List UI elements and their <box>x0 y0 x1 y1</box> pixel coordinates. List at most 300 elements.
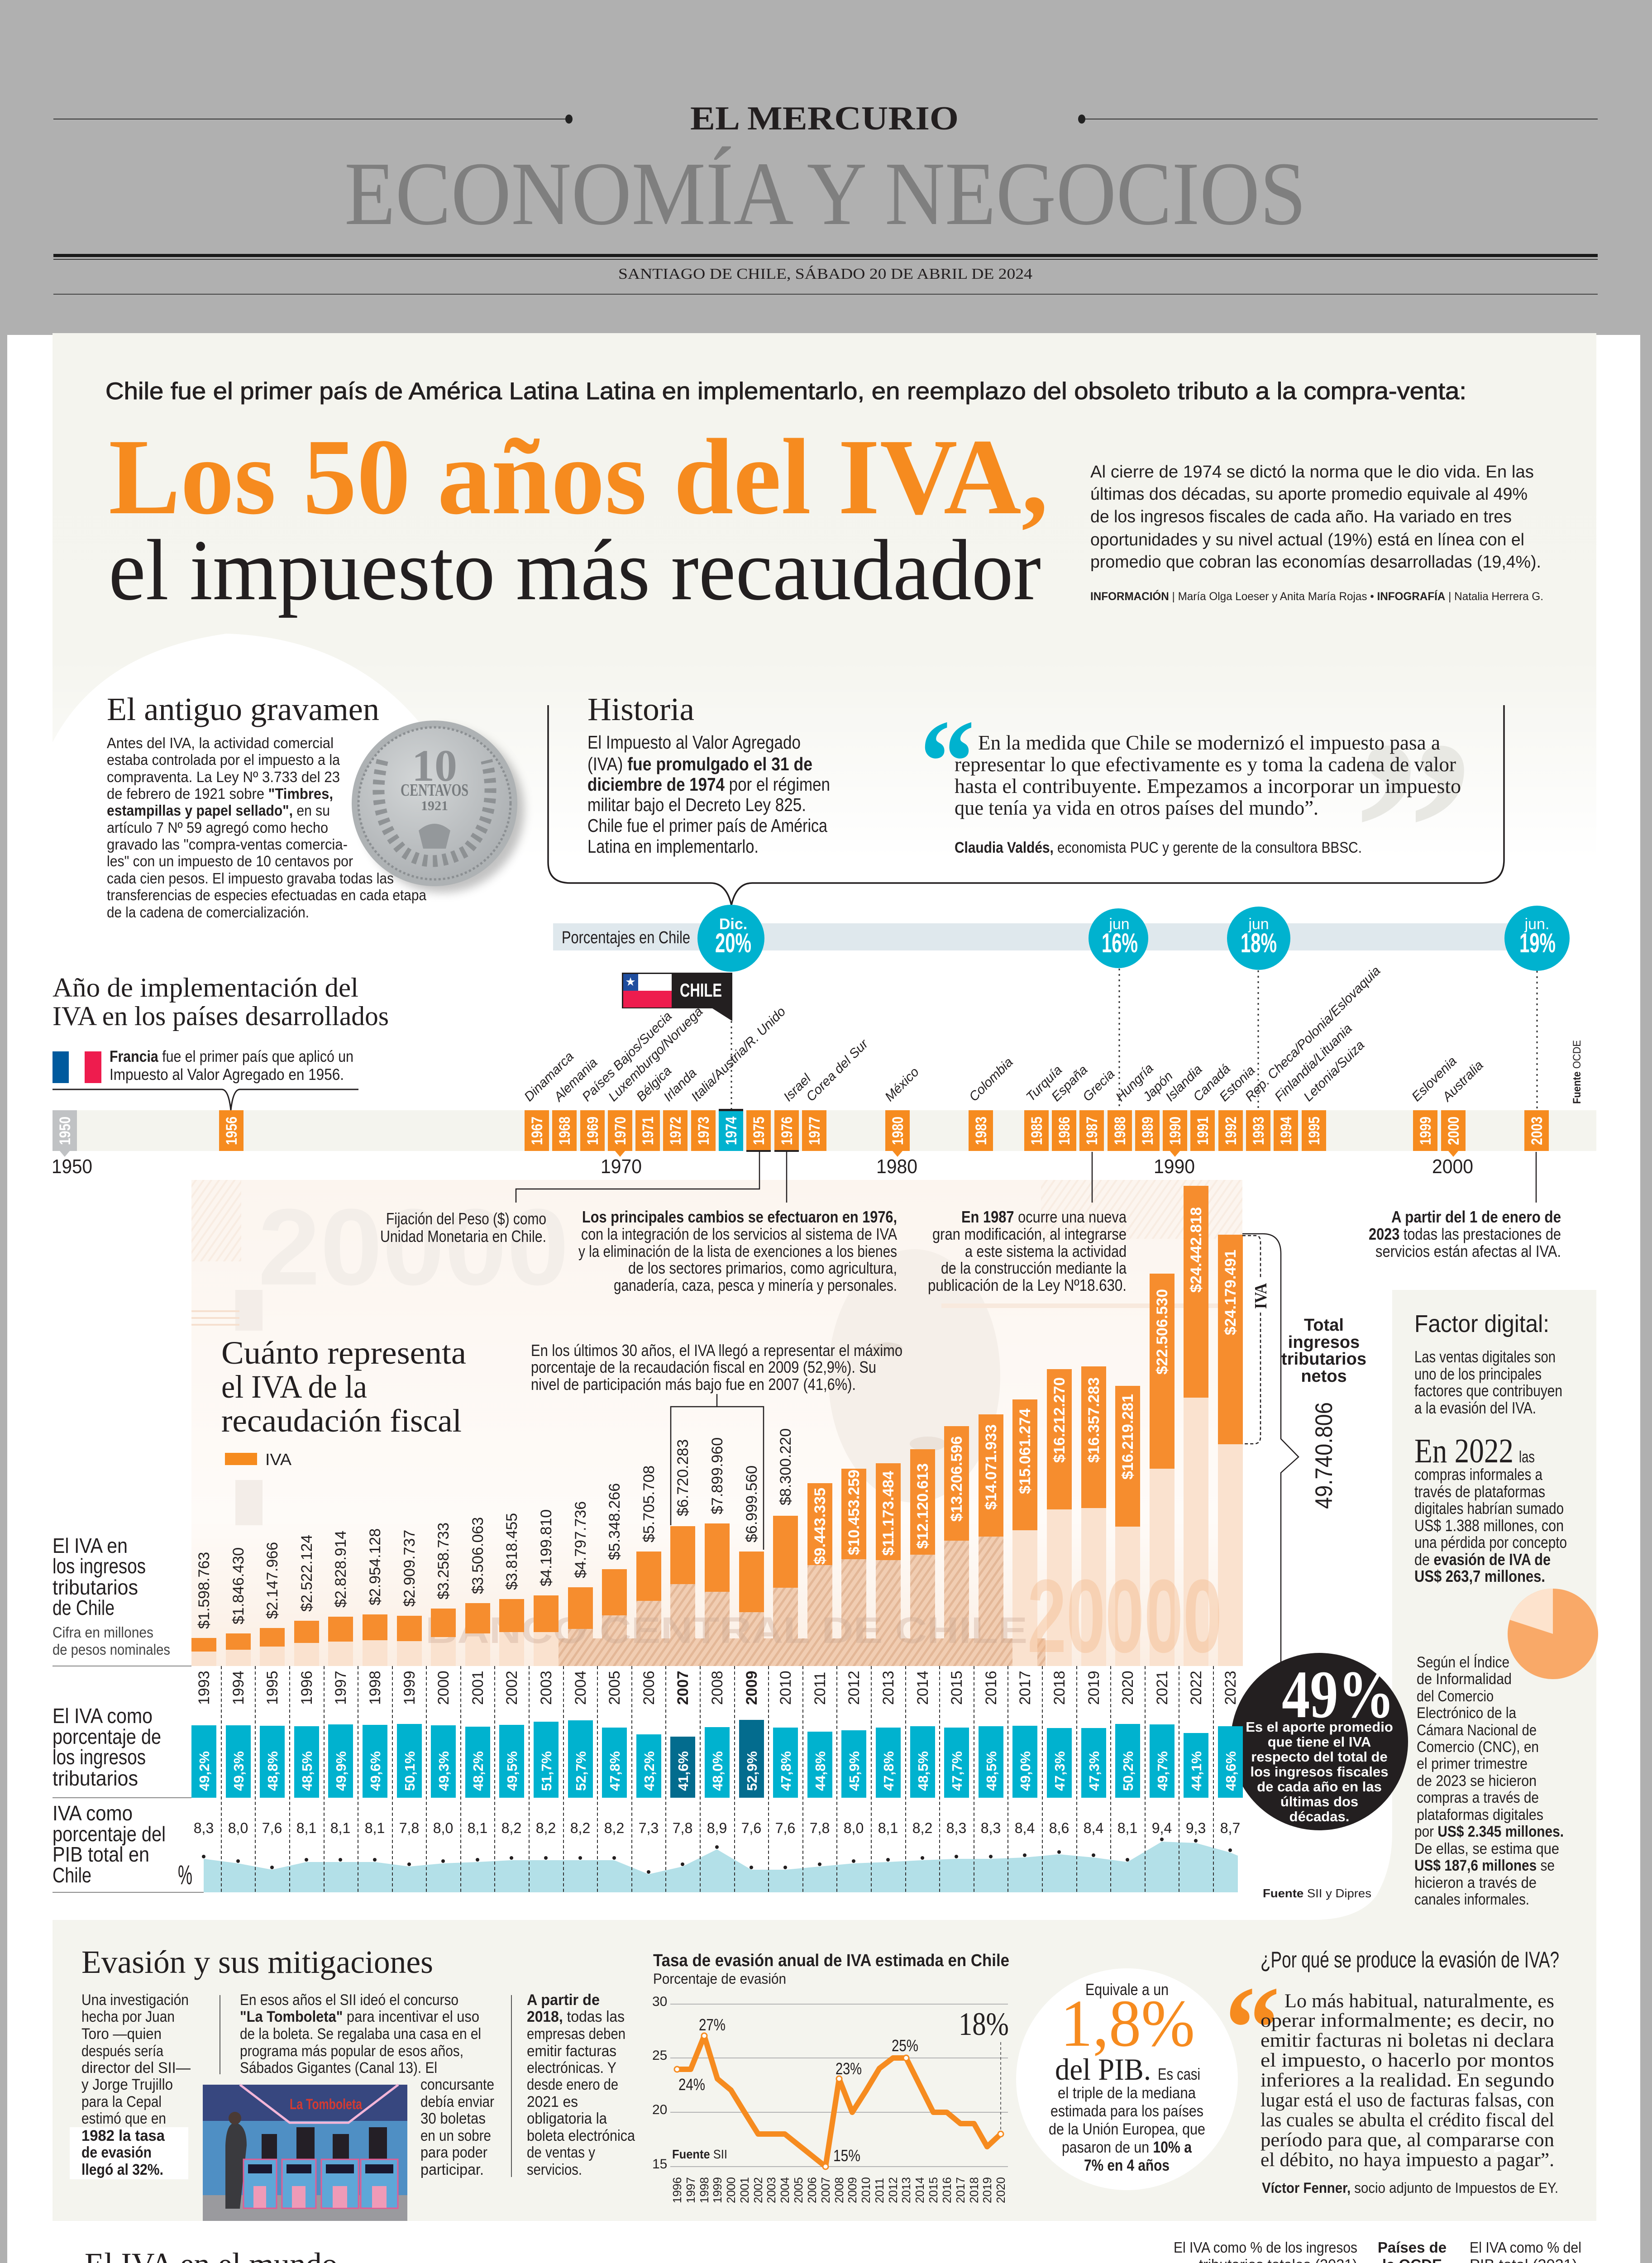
total net tax revenue: netos <box>1301 1367 1347 1386</box>
pie chart: evasion share <box>1508 1589 1598 1679</box>
panel: Factor digital: de evasión de IVA de <box>1414 1550 1551 1569</box>
text column 2: participar. <box>420 2161 484 2178</box>
text column 1: de evasión <box>81 2144 152 2161</box>
callout: 49% <box>1231 1653 1408 1830</box>
area chart: IVA as percentage of GDP: 8,2 <box>912 1820 932 1836</box>
area chart: IVA as percentage of GDP: 7,8 <box>399 1820 419 1836</box>
year labels for the main chart: 1993 <box>196 1671 213 1705</box>
panel: El antiguo gravamen: Antes del IVA, la actividad comercial <box>107 735 334 751</box>
country labels on timeline: Irlanda <box>661 1066 700 1104</box>
country labels on timeline <box>521 964 1486 1105</box>
line chart: evasion rate: 2006 <box>805 2177 819 2203</box>
year box labels: 1992 <box>1222 1117 1240 1145</box>
quote: Víctor Fenner: el débito, no haya impuesto a pagar”. <box>1260 2149 1554 2171</box>
area chart: IVA as percentage of GDP: 8,1 <box>1117 1820 1137 1836</box>
year box labels: 1987 <box>1084 1117 1101 1145</box>
note: 1987: gran modificación, al integrarse <box>932 1225 1127 1243</box>
text: Índice de Informalidad: hicieron a través de <box>1414 1874 1537 1891</box>
bar chart: IVA share of tax revenue: 51,7% <box>539 1751 554 1791</box>
note: Fijación del Peso: Fijación del Peso ($) como <box>386 1209 546 1228</box>
text column 1: para la Cepal <box>81 2093 162 2110</box>
year box labels: 1985 <box>1028 1117 1046 1145</box>
country labels on timeline: Colombia <box>966 1055 1016 1104</box>
year labels for the main chart: 2017 <box>1017 1671 1034 1705</box>
year box labels: 1993 <box>1250 1117 1267 1145</box>
decade labels: 1950 <box>52 1155 92 1178</box>
year labels for the main chart: 2004 <box>572 1671 589 1705</box>
line chart: evasion rate <box>652 1951 1009 2203</box>
row labels for the main chart: Chile <box>53 1863 91 1887</box>
line chart: evasion rate: 2005 <box>792 2177 805 2203</box>
line chart: evasion rate: 30 <box>652 1994 667 2009</box>
country labels on timeline: Finlandia/Lituania <box>1272 1022 1355 1104</box>
row labels for the main chart: IVA como <box>53 1801 133 1825</box>
decade labels: 2000 <box>1432 1155 1473 1178</box>
callout: CHILE flag: CHILE <box>680 979 722 1001</box>
heading: Año de implementación <box>53 973 389 1031</box>
line chart: evasion rate: 2014 <box>913 2177 926 2203</box>
text column 3: de ventas y <box>527 2144 595 2161</box>
area chart: IVA as percentage of GDP: 8,0 <box>844 1820 864 1836</box>
year labels for the main chart: 2002 <box>503 1671 520 1705</box>
year box labels: 1969 <box>584 1117 602 1145</box>
text: Índice de Informalidad: US$ 187,6 millones se <box>1414 1857 1555 1874</box>
timeline: percentages in Chile: jun <box>1108 916 1130 933</box>
text column 1: Toro —quien <box>81 2025 162 2043</box>
bar chart: IVA share of tax revenue: 48,5% <box>984 1751 999 1791</box>
intro text: de los ingresos fiscales de cada año. Ha variado en tres <box>1090 507 1512 526</box>
year box labels: 1971 <box>640 1117 657 1145</box>
year boxes <box>53 1109 1549 1157</box>
panel: El antiguo gravamen: compraventa. La Ley Nº 3.733 del 23 <box>107 769 340 785</box>
text column 2: concursante <box>420 2076 494 2093</box>
panel: Factor digital: a la evasión del IVA. <box>1414 1399 1536 1417</box>
text: Índice de Informalidad: Electrónico de la <box>1417 1704 1516 1722</box>
area chart: IVA as percentage of GDP: 8,2 <box>604 1820 624 1836</box>
timeline: percentages in Chile: jun. <box>1524 916 1549 933</box>
panel: El antiguo gravamen: transferencias de especies efectuadas en cada etapa <box>107 887 427 903</box>
note: 1987: En 1987 ocurre una nueva <box>961 1208 1127 1226</box>
year box labels: 2000 <box>1445 1117 1462 1145</box>
bar chart: IVA share of tax revenue: 48,5% <box>915 1751 931 1791</box>
country labels on timeline: Hungría <box>1113 1061 1156 1104</box>
bar chart: IVA share of tax revenue: 49,6% <box>368 1751 383 1791</box>
decade labels: 1990 <box>1154 1155 1195 1178</box>
stacked bar chart: IVA in tax revenue: $22.506.530 <box>1154 1289 1171 1375</box>
panel: El antiguo gravamen: El antiguo gravamen <box>107 691 379 727</box>
panel: Factor digital: Las ventas digitales son <box>1414 1347 1556 1366</box>
quote: Víctor Fenner: Víctor Fenner, socio adjunto de Impuestos de EY. <box>1262 2180 1558 2196</box>
area chart: IVA as percentage of GDP: 8,2 <box>501 1820 521 1836</box>
year labels for the main chart: 2021 <box>1154 1671 1171 1705</box>
year labels for the main chart: 2005 <box>606 1671 623 1705</box>
line chart: evasion rate: 25% <box>892 2036 918 2055</box>
text: Índice de Informalidad: Cámara Nacional de <box>1417 1722 1537 1739</box>
year labels for the main chart: 1997 <box>332 1671 349 1705</box>
line chart: evasion rate: 1996 <box>670 2177 684 2203</box>
stacked bar chart: IVA in tax revenue: $4.797.736 <box>572 1501 589 1578</box>
note: 1987 <box>928 1208 1127 1294</box>
area chart: IVA as percentage of GDP: 8,1 <box>468 1820 487 1836</box>
bar chart: IVA share of tax revenue: 50,2% <box>1120 1751 1136 1791</box>
text column 3: empresas deben <box>527 2025 625 2043</box>
text column 1: después sería <box>81 2043 163 2060</box>
row labels for the main chart: Cifra en millones <box>53 1624 153 1641</box>
country labels on timeline: Islandia <box>1163 1062 1205 1104</box>
panel: Factor digital background <box>1313 1290 1596 1920</box>
text column 1: hecha por Juan <box>81 2008 175 2025</box>
stacked bar chart: IVA in tax revenue: BANCO CENTRAL DE CHILE <box>425 1610 1027 1651</box>
text column 2: debía enviar <box>420 2093 494 2110</box>
area chart: IVA as percentage of GDP: 8,1 <box>330 1820 350 1836</box>
area chart: IVA as percentage of GDP: 8,3 <box>981 1820 1001 1836</box>
text column 3: boleta electrónica <box>527 2127 635 2144</box>
area chart: IVA as percentage of GDP: 8,1 <box>365 1820 385 1836</box>
text column 3: obligatoria la <box>527 2110 607 2127</box>
callout: 49%: los ingresos fiscales <box>1251 1764 1388 1780</box>
title block: Los 50 años del IVA, <box>109 416 1048 537</box>
panel: Historia: Latina en implementarlo. <box>587 836 759 857</box>
heading: Cuánto representa: recaudación fiscal <box>221 1403 462 1439</box>
beige header panel <box>53 333 1596 860</box>
stacked bar chart: IVA in tax revenue: $4.199.810 <box>538 1509 555 1586</box>
timeline: percentages in Chile: 19% <box>1519 928 1556 958</box>
country labels on timeline: Canadá <box>1190 1061 1233 1104</box>
line chart: evasion rate: Porcentaje de evasión <box>653 1971 786 1987</box>
area chart: IVA as percentage of GDP: 8,3 <box>194 1820 214 1836</box>
text column 2: programa más popular de esos años, <box>240 2043 463 2060</box>
decade labels: 1980 <box>876 1155 917 1178</box>
panel: Factor digital: las <box>1519 1447 1535 1466</box>
year box labels: 1967 <box>529 1117 546 1145</box>
year labels for the main chart: 2023 <box>1222 1671 1239 1705</box>
photo: La Tomboleta TV show: La Tomboleta <box>290 2096 362 2112</box>
note: 1976: Los principales cambios se efectuaron en 1976, <box>582 1208 897 1226</box>
heading: Año de implementación: IVA en los países desarrollados <box>53 1001 389 1031</box>
line chart: evasion rate: 24% <box>678 2075 705 2094</box>
text column 2: para poder <box>420 2144 487 2161</box>
country labels on timeline: Estonia <box>1217 1063 1258 1104</box>
year box labels: 1973 <box>695 1117 712 1145</box>
stacked bar chart: IVA in tax revenue: $16.357.283 <box>1085 1377 1103 1463</box>
line chart: evasion rate: Tasa de evasión anual de IVA estimada en Chile <box>653 1951 1009 1970</box>
heading: Cuánto representa: Cuánto representa <box>221 1335 466 1371</box>
year box labels: 1986 <box>1056 1117 1073 1145</box>
year box labels: 1976 <box>778 1117 796 1145</box>
note: 1976: de los sectores primarios, como agricultura, <box>628 1259 897 1277</box>
bar chart: IVA share of tax revenue: 43,2% <box>641 1751 657 1791</box>
callout: 1,8% del PIB: 7% en 4 años <box>1084 2157 1170 2174</box>
note: Fijación del Peso: Unidad Monetaria en Chile. <box>380 1227 546 1246</box>
table header <box>1174 2239 1581 2263</box>
total net tax revenue: Total <box>1304 1316 1344 1335</box>
year box labels: 1983 <box>973 1117 990 1145</box>
row labels for the main chart: El IVA como <box>53 1704 153 1728</box>
timeline: percentages in Chile: jun <box>1248 916 1269 933</box>
line chart: evasion rate: 15% <box>833 2146 860 2165</box>
line chart: evasion rate: 2013 <box>899 2177 913 2203</box>
panel: Historia <box>548 691 1504 905</box>
callout: 1,8% del PIB: del PIB. <box>1055 2052 1151 2086</box>
area chart: IVA as percentage of GDP: 7,8 <box>810 1820 830 1836</box>
text column 1: y Jorge Trujillo <box>81 2076 173 2093</box>
country labels on timeline: Japón <box>1140 1069 1176 1105</box>
quote: Víctor Fenner: emitir facturas ni boletas ni declara <box>1260 2030 1554 2051</box>
country labels on timeline: Países Bajos/Suecia <box>579 1009 675 1104</box>
row labels for the main chart: los ingresos <box>53 1745 146 1769</box>
title block <box>105 378 1466 618</box>
text: Índice de Informalidad: de Informalidad <box>1417 1671 1512 1688</box>
stacked bar chart: IVA in tax revenue: $3.818.455 <box>503 1513 520 1590</box>
Francia note with flag: Francia fue el primer país que aplicó un <box>110 1048 353 1065</box>
year box labels: 2003 <box>1528 1117 1546 1145</box>
bar chart: IVA share of tax revenue: 44,8% <box>812 1751 828 1791</box>
year box labels: 1970 <box>612 1117 629 1145</box>
note: 1987: publicación de la Ley Nº18.630. <box>928 1276 1127 1294</box>
year labels for the main chart <box>196 1671 1239 1705</box>
heading: Evasión: Evasión y sus mitigaciones <box>81 1944 433 1980</box>
panel: Factor digital: En 2022 <box>1414 1432 1514 1470</box>
line chart: evasion rate: 23% <box>836 2059 862 2078</box>
title block: el impuesto más recaudador <box>109 522 1041 618</box>
line chart: evasion rate: 2012 <box>886 2177 900 2203</box>
country labels on timeline: Bélgica <box>634 1064 674 1104</box>
row labels for the main chart: % <box>178 1860 192 1890</box>
panel: El antiguo gravamen: de la cadena de comercialización. <box>107 904 309 921</box>
note: 1987: de la construcción mediante la <box>941 1259 1127 1277</box>
timeline: percentages in Chile <box>553 905 1570 972</box>
bar chart: IVA share of tax revenue: 47,7% <box>949 1751 965 1791</box>
quote: Claudia Valdés: que tenía ya vida en otros países del mundo”. <box>955 797 1318 819</box>
quote: Víctor Fenner: “ <box>1225 1962 1280 2095</box>
text: Índice de Informalidad: el primer trimestre <box>1417 1755 1528 1772</box>
quote: Claudia Valdés: representar lo que efectivamente es y toma la cadena de valor <box>955 753 1456 776</box>
text column 3: servicios. <box>527 2161 582 2178</box>
timeline: percentages in Chile: 18% <box>1241 928 1277 958</box>
area chart: IVA as percentage of GDP: 8,0 <box>433 1820 453 1836</box>
text column 2: "La Tomboleta" para incentivar el uso <box>240 2008 479 2025</box>
row labels for the main chart: tributarios <box>53 1576 138 1599</box>
year box labels: 1990 <box>1167 1117 1184 1145</box>
panel: Factor digital <box>1414 1310 1567 1585</box>
note: últimos 30 años <box>531 1341 902 1394</box>
panel: El antiguo gravamen: gravado las "compra-ventas comercia- <box>107 836 348 853</box>
text column 1: director del SII— <box>81 2059 191 2077</box>
bar chart: IVA share of tax revenue: 48,8% <box>265 1751 281 1791</box>
note: últimos 30 años: porcentaje de la recaudación fiscal en 2009 (52,9%). Su <box>531 1358 876 1376</box>
area chart: IVA as percentage of GDP: 8,6 <box>1049 1820 1069 1836</box>
year labels for the main chart: 2019 <box>1085 1671 1103 1705</box>
bar chart: IVA share of tax revenue: 48,6% <box>1223 1751 1239 1791</box>
text column 1: 1982 la tasa <box>81 2127 165 2144</box>
text column 1: Una investigación <box>81 1991 189 2009</box>
note: 1987: a este sistema la actividad <box>965 1242 1127 1260</box>
line chart: evasion rate: 2004 <box>778 2177 792 2203</box>
bracket: IVA and total: IVA <box>1251 1283 1270 1309</box>
source note: SII y Dipres: Fuente SII y Dipres <box>1263 1886 1371 1900</box>
year labels for the main chart: 2009 <box>743 1671 760 1705</box>
row labels for the main chart: de Chile <box>53 1596 115 1619</box>
stacked bar chart: IVA in tax revenue: $16.212.270 <box>1051 1377 1068 1463</box>
year labels for the main chart: 1994 <box>230 1671 247 1705</box>
year labels for the main chart: 1995 <box>264 1671 281 1705</box>
icon: coin 10 centavos 1921: 1921 <box>421 798 448 813</box>
bar chart: IVA share of tax revenue: 49,5% <box>504 1751 520 1791</box>
note: 2023: servicios están afectas al IVA. <box>1375 1242 1561 1260</box>
icon: coin 10 centavos 1921 <box>352 721 524 893</box>
panel: Factor digital: una pérdida por concepto <box>1414 1533 1567 1552</box>
country labels on timeline: Alemania <box>551 1055 600 1105</box>
bar chart: IVA share of tax revenue: 49,0% <box>1017 1751 1033 1791</box>
year box labels: 1988 <box>1112 1117 1129 1145</box>
panel: Factor digital: US$ 1.388 millones, con <box>1414 1516 1564 1535</box>
panel: Factor digital: compras informales a <box>1414 1465 1543 1484</box>
timeline: percentages in Chile: Dic. <box>719 916 747 933</box>
callout: 49%: que tiene el IVA <box>1268 1734 1371 1750</box>
text: Índice de Informalidad: De ellas, se estima que <box>1414 1840 1559 1857</box>
intro text: últimas dos décadas, su aporte promedio equivale al 49% <box>1090 485 1528 504</box>
bracket: IVA and total <box>1242 1234 1299 1666</box>
callout: 49%: de cada año en las <box>1257 1779 1382 1795</box>
year labels for the main chart: 2020 <box>1119 1671 1136 1705</box>
panel: Historia: Chile fue el primer país de América <box>587 815 827 836</box>
stacked bar chart: IVA in tax revenue: $13.206.596 <box>948 1436 965 1522</box>
year labels for the main chart: 2013 <box>880 1671 897 1705</box>
note: 2023: A partir del 1 de enero de <box>1391 1208 1561 1226</box>
country labels on timeline: Australia <box>1439 1058 1486 1105</box>
stacked bar chart: IVA in tax revenue <box>191 1186 1243 1674</box>
line chart: evasion rate: Fuente SII <box>672 2147 727 2161</box>
bar chart: IVA share of tax revenue: 49,2% <box>196 1751 212 1791</box>
bar chart: IVA share of tax revenue: 47,8% <box>778 1751 794 1791</box>
country labels on timeline: Eslovenia <box>1409 1054 1460 1104</box>
text column 3 <box>527 1991 635 2178</box>
year box labels: 1968 <box>556 1117 573 1145</box>
callout: 1,8% del PIB <box>1016 1968 1238 2190</box>
timeline: percentages in Chile: Porcentajes en Chile <box>562 928 690 947</box>
heading: Cuánto representa <box>221 1335 466 1439</box>
text: Índice de Informalidad <box>1414 1654 1564 1908</box>
stacked bar chart: IVA in tax revenue: $2.828.914 <box>332 1531 349 1608</box>
note: 1976 <box>578 1208 897 1294</box>
line chart: evasion rate: 2019 <box>980 2177 994 2203</box>
intro text: promedio que cobran las economías desarrolladas (19,4%). <box>1090 553 1541 572</box>
line chart: evasion rate: 2011 <box>873 2178 886 2203</box>
bar chart: IVA share of tax revenue: 49,9% <box>333 1751 349 1791</box>
bar chart: IVA share of tax revenue: 47,3% <box>1052 1751 1068 1791</box>
text: Índice de Informalidad: canales informales. <box>1414 1891 1529 1908</box>
text column 1 <box>70 1991 191 2179</box>
stacked bar chart: IVA in tax revenue: $24.179.491 <box>1222 1250 1239 1335</box>
callout: CHILE flag: ★ <box>625 975 636 988</box>
bracket 2007-2009 <box>671 1394 764 1550</box>
area chart: IVA as percentage of GDP: 8,0 <box>228 1820 248 1836</box>
year labels for the main chart: 2010 <box>777 1671 794 1705</box>
area chart: IVA as percentage of GDP: 8,7 <box>1220 1820 1240 1836</box>
quote: Claudia Valdés <box>920 689 1475 969</box>
line chart: evasion rate: 15 <box>652 2157 667 2172</box>
stacked bar chart: IVA in tax revenue: $7.899.960 <box>709 1437 726 1514</box>
stacked bar chart: IVA in tax revenue: $11.173.484 <box>880 1471 897 1556</box>
bar chart: IVA share of tax revenue: 52,7% <box>573 1751 589 1791</box>
year box labels: 1972 <box>667 1117 684 1145</box>
year box labels: 1950 <box>57 1117 74 1145</box>
year labels for the main chart: 1996 <box>298 1671 315 1705</box>
year box labels: 1994 <box>1278 1117 1295 1145</box>
panel: Historia: Historia <box>587 691 694 727</box>
year labels for the main chart: 2003 <box>538 1671 555 1705</box>
line chart: evasion rate: 2003 <box>764 2177 778 2203</box>
panel: Factor digital: través de plataformas <box>1414 1482 1545 1501</box>
year labels for the main chart: 1999 <box>401 1671 418 1705</box>
area chart: IVA as percentage of GDP: 7,6 <box>741 1820 761 1836</box>
bar chart: IVA share of tax revenue: 48,0% <box>710 1751 726 1791</box>
note: últimos 30 años: nivel de participación más bajo fue en 2007 (41,6%). <box>531 1375 856 1394</box>
callout: 1,8% del PIB: 1,8% <box>1060 1986 1195 2061</box>
timeline: percentages in Chile: 16% <box>1102 928 1138 958</box>
text: Índice de Informalidad: plataformas digitales <box>1417 1806 1543 1824</box>
callout: 49%: últimas dos <box>1280 1794 1358 1809</box>
title block: Chile fue el primer país de América Latina Latina en implementarlo, en reemplazo del obsoleto tributo a la compra-venta: <box>105 378 1466 405</box>
masthead <box>53 100 1598 295</box>
row labels for the main chart <box>53 1534 192 1890</box>
year labels for the main chart: 2006 <box>640 1671 658 1705</box>
bar chart: IVA share of tax revenue: 49,3% <box>231 1751 247 1791</box>
white arc behind the old tax section <box>53 634 434 923</box>
masthead: EL MERCURIO <box>690 100 959 137</box>
text column 1: llegó al 32%. <box>81 2161 163 2178</box>
text column 2 <box>240 1991 494 2178</box>
stacked bar chart: IVA in tax revenue: $14.071.933 <box>983 1424 1000 1510</box>
bar chart: IVA share of tax revenue: 52,9% <box>744 1751 760 1791</box>
intro text: Al cierre de 1974 se dictó la norma que le dio vida. En las <box>1090 463 1534 482</box>
stacked bar chart: IVA in tax revenue: $2.909.737 <box>401 1530 418 1607</box>
intro text: INFORMACIÓN | María Olga Loeser y Anita María Rojas • INFOGRAFÍA | Natalia Herrera G. <box>1090 589 1543 603</box>
text column 2: 30 boletas <box>420 2110 486 2127</box>
year labels for the main chart: 2015 <box>948 1671 965 1705</box>
row labels for the main chart: El IVA en <box>53 1534 128 1557</box>
line chart: evasion rate: 20 <box>652 2102 667 2117</box>
stacked bar chart: IVA in tax revenue: $2.147.966 <box>264 1542 281 1619</box>
area chart: IVA as percentage of GDP: 8,4 <box>1084 1820 1103 1836</box>
bar chart: IVA share of tax revenue: 47,8% <box>881 1751 897 1791</box>
callout: 1,8% del PIB: pasaron de un 10% a <box>1062 2139 1192 2156</box>
line chart: evasion rate: 2017 <box>954 2177 967 2203</box>
text: Índice de Informalidad: de 2023 se hicieron <box>1417 1772 1537 1790</box>
stacked bar chart: IVA in tax revenue: $3.258.733 <box>435 1523 452 1599</box>
heading: Año de implementación: Año de implementación del <box>53 973 358 1003</box>
area chart: IVA as percentage of GDP: 7,6 <box>262 1820 282 1836</box>
country labels on timeline: Rep. Checa/Polonia/Eslovaquia <box>1242 964 1383 1104</box>
area chart: IVA as percentage of GDP <box>194 1820 1240 1892</box>
area chart: IVA as percentage of GDP: 9,3 <box>1186 1820 1206 1836</box>
table header: El IVA como % de los ingresos <box>1174 2239 1357 2256</box>
area chart: IVA as percentage of GDP: 7,8 <box>673 1820 692 1836</box>
panel: El antiguo gravamen: estampillas y papel sellado", en su <box>107 802 330 819</box>
callout: 49%: 49% <box>1282 1657 1394 1732</box>
text column 2: de la boleta. Se regalaba una casa en el <box>240 2025 481 2043</box>
note: 2023: 2023 todas las prestaciones de <box>1369 1225 1561 1243</box>
bar chart: IVA share of tax revenue: 48,5% <box>299 1751 315 1791</box>
area chart: IVA as percentage of GDP: 8,2 <box>570 1820 590 1836</box>
stacked bar chart: IVA in tax revenue: $2.954.128 <box>367 1528 384 1605</box>
line chart: evasion rate: 1999 <box>711 2177 724 2203</box>
table header: El IVA como % del <box>1470 2239 1581 2256</box>
text column 3: desde enero de <box>527 2076 618 2093</box>
text: Índice de Informalidad: del Comercio <box>1417 1688 1494 1705</box>
year box labels: 1989 <box>1139 1117 1156 1145</box>
year labels for the main chart: 2012 <box>845 1671 863 1705</box>
